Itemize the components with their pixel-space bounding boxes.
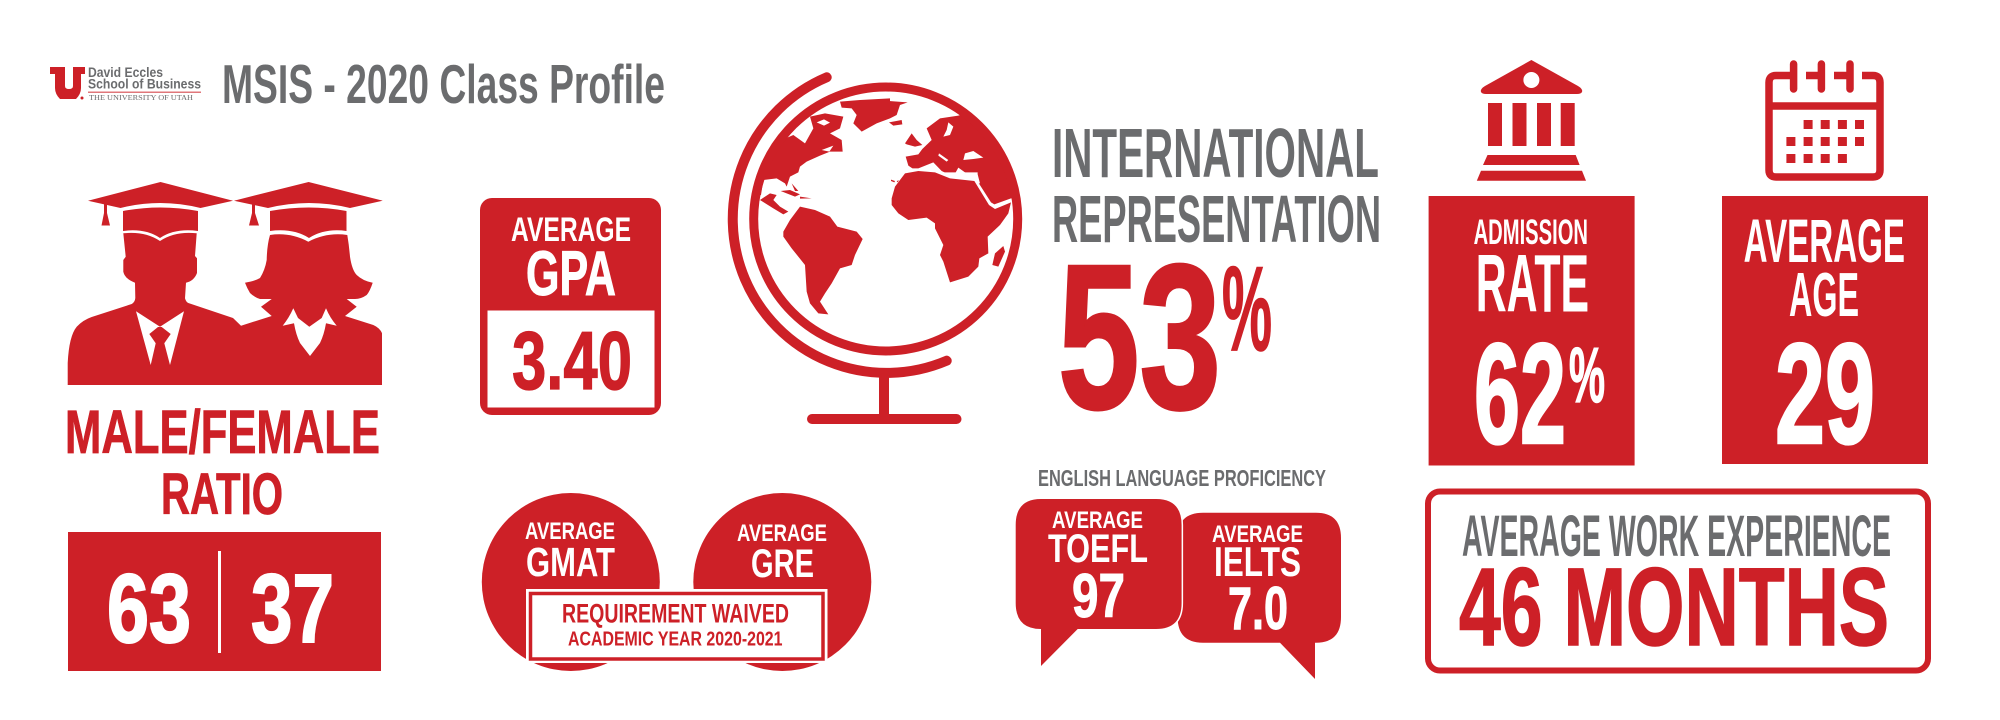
heading: international representation [1052,114,1381,257]
heading: male/female ratio: RATIO [161,462,283,527]
speech bubble: average IELTS: 7.0 [1228,575,1288,642]
panel: admission rate: % [1569,331,1605,419]
speech bubble: average IELTS: AVERAGE [1212,521,1303,548]
circle: average GMAT: GMAT [526,539,615,585]
speech bubble: average TOEFL: AVERAGE [1052,507,1143,534]
banner: requirement waived [526,589,828,663]
banner: requirement waived: REQUIREMENT WAIVED [562,598,789,628]
heading: international representation: INTERNATIONAL [1052,114,1379,192]
male graduate [68,182,241,385]
panel: average age: 29 [1775,315,1875,474]
female graduate [234,182,383,385]
icon: university building [1477,60,1586,181]
circle: average GRE: AVERAGE [737,520,827,547]
panel: ratio values [68,532,381,671]
continents [750,98,1025,314]
panel: GMAT and GRE requirement waived [482,493,871,671]
panel: admission rate: RATE [1476,239,1589,330]
icon: globe on stand [733,77,1025,419]
circle: average GRE: GRE [751,542,814,586]
logo: David Eccles School of Business [50,64,201,102]
logo: David Eccles School of Business: David Eccles [88,64,163,80]
icon: calendar [1769,64,1880,177]
logo: David Eccles School of Business: THE UNIVERSITY OF UTAH [89,94,193,102]
heading: male/female ratio [65,398,380,527]
speech bubble: average TOEFL [1016,499,1182,666]
panel: average age: AGE [1789,261,1859,330]
panel: average work experience [1428,492,1928,670]
panel: average GPA: AVERAGE [511,211,631,249]
panel: ratio values: 37 [251,554,334,663]
panel: ratio values: 63 [107,554,191,663]
stat: 53 percent: 53 [1058,222,1221,452]
panel: average age [1722,196,1928,474]
heading: English language proficiency: ENGLISH LANGUAGE PROFICIENCY [1038,465,1326,491]
heading: international representation: REPRESENTATION [1052,182,1381,257]
speech bubble: average TOEFL: TOEFL [1048,527,1148,571]
heading: male/female ratio: MALE/FEMALE [65,398,380,466]
panel: average GPA: GPA [526,239,616,309]
banner: requirement waived: ACADEMIC YEAR 2020-2021 [568,628,782,650]
panel: admission rate: 62 [1474,315,1566,474]
panel: average GPA: 3.40 [512,314,632,407]
panel: admission rate [1429,196,1635,474]
panel: admission rate: ADMISSION [1474,213,1588,252]
panel: average GPA [480,198,661,415]
title: MSIS - 2020 Class Profile [222,53,665,115]
icon: male and female graduates [68,182,383,385]
speech bubble: average IELTS [1178,513,1341,679]
circle: average GMAT [482,493,660,671]
speech bubble: average TOEFL: 97 [1072,562,1125,631]
circle: average GRE [693,493,871,671]
text: % [1222,242,1272,376]
circle: average GMAT: AVERAGE [525,518,615,545]
speech bubble: average IELTS: IELTS [1214,538,1301,585]
logo: David Eccles School of Business: School of Business [88,76,201,92]
